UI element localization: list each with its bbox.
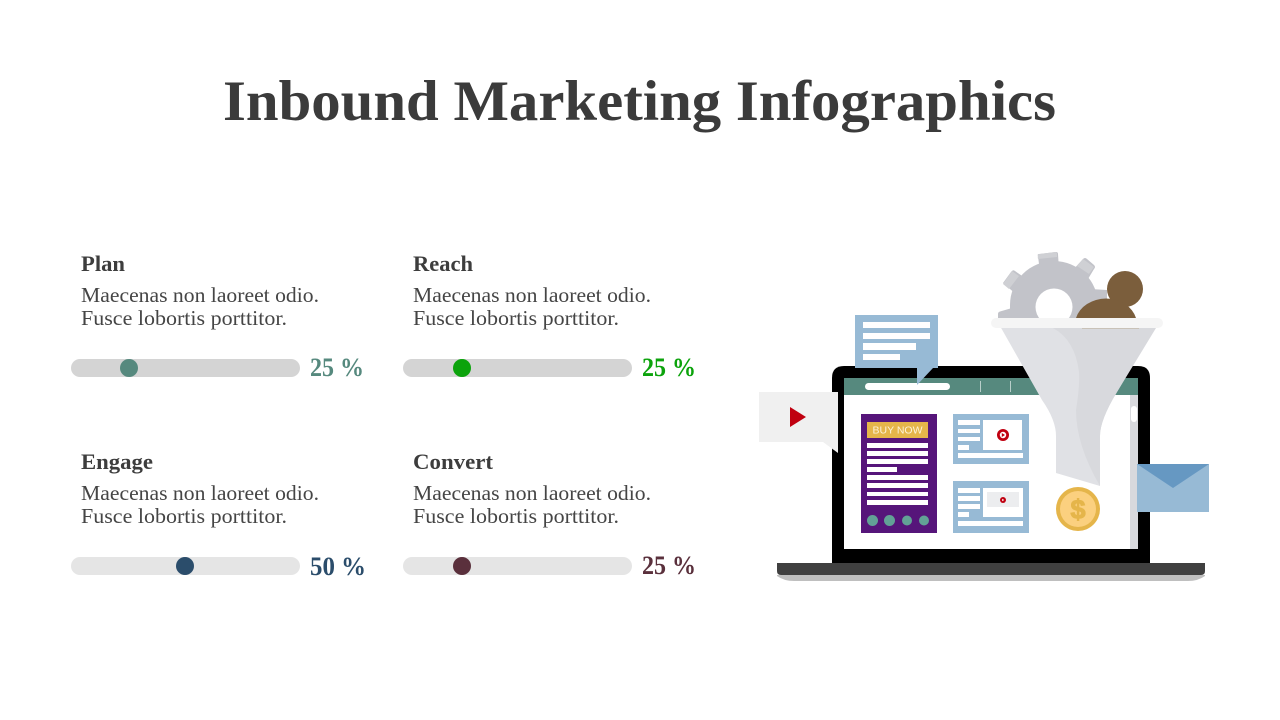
- text block: engage description: Fusce lobortis porttitor.: [81, 504, 287, 528]
- text block: reach description: [413, 283, 651, 330]
- value: convert 25%: 25 %: [642, 551, 696, 580]
- progress bar: plan 25%: [71, 359, 300, 377]
- value: engage 50%: 50 %: [310, 552, 366, 581]
- text block: convert description: [413, 481, 651, 528]
- panel: buy now ad: [861, 414, 937, 533]
- text block: plan description: Fusce lobortis porttitor.: [81, 306, 287, 330]
- icon: envelope: [1137, 464, 1209, 512]
- icon: dollar coin: [1056, 487, 1100, 531]
- heading: engage: Engage: [81, 449, 153, 474]
- panel: convert: [403, 449, 696, 580]
- text block: engage description: Maecenas non laoreet odio.: [81, 481, 319, 505]
- icon: funnel: [991, 318, 1163, 486]
- progress bar: engage 50%: [71, 557, 300, 575]
- title: Inbound Marketing Infographics: [223, 70, 1056, 133]
- value: reach 25%: 25 %: [642, 353, 696, 382]
- panel: video card bottom: [953, 481, 1029, 533]
- icon: laptop: [777, 366, 1205, 581]
- illustration: inbound marketing laptop and funnel: [759, 252, 1209, 581]
- icon: gear: [998, 252, 1107, 326]
- panel: video card top: [953, 414, 1029, 464]
- value: plan 25%: 25 %: [310, 353, 364, 382]
- icon: chat bubble: [855, 315, 938, 385]
- panel: reach: [403, 251, 696, 382]
- text block: plan description: [81, 283, 319, 330]
- icon: person: [1076, 271, 1143, 318]
- text block: engage description: [81, 481, 319, 528]
- text block: reach description: Maecenas non laoreet odio.: [413, 283, 651, 307]
- panel: engage: [71, 449, 366, 581]
- panel: plan: [71, 251, 364, 382]
- text block: plan description: Maecenas non laoreet odio.: [81, 283, 319, 307]
- text block: convert description: Maecenas non laoreet odio.: [413, 481, 651, 505]
- progress bar: convert 25%: [403, 557, 632, 575]
- icon: dollar coin: $: [1070, 494, 1086, 524]
- panel: buy now ad: BUY NOW: [873, 424, 923, 436]
- heading: convert: Convert: [413, 449, 494, 474]
- heading: plan: Plan: [81, 251, 125, 276]
- text block: reach description: Fusce lobortis porttitor.: [413, 306, 619, 330]
- progress bar: reach 25%: [403, 359, 632, 377]
- heading: reach: Reach: [413, 251, 473, 276]
- icon: video bubble: [759, 392, 838, 453]
- text block: convert description: Fusce lobortis porttitor.: [413, 504, 619, 528]
